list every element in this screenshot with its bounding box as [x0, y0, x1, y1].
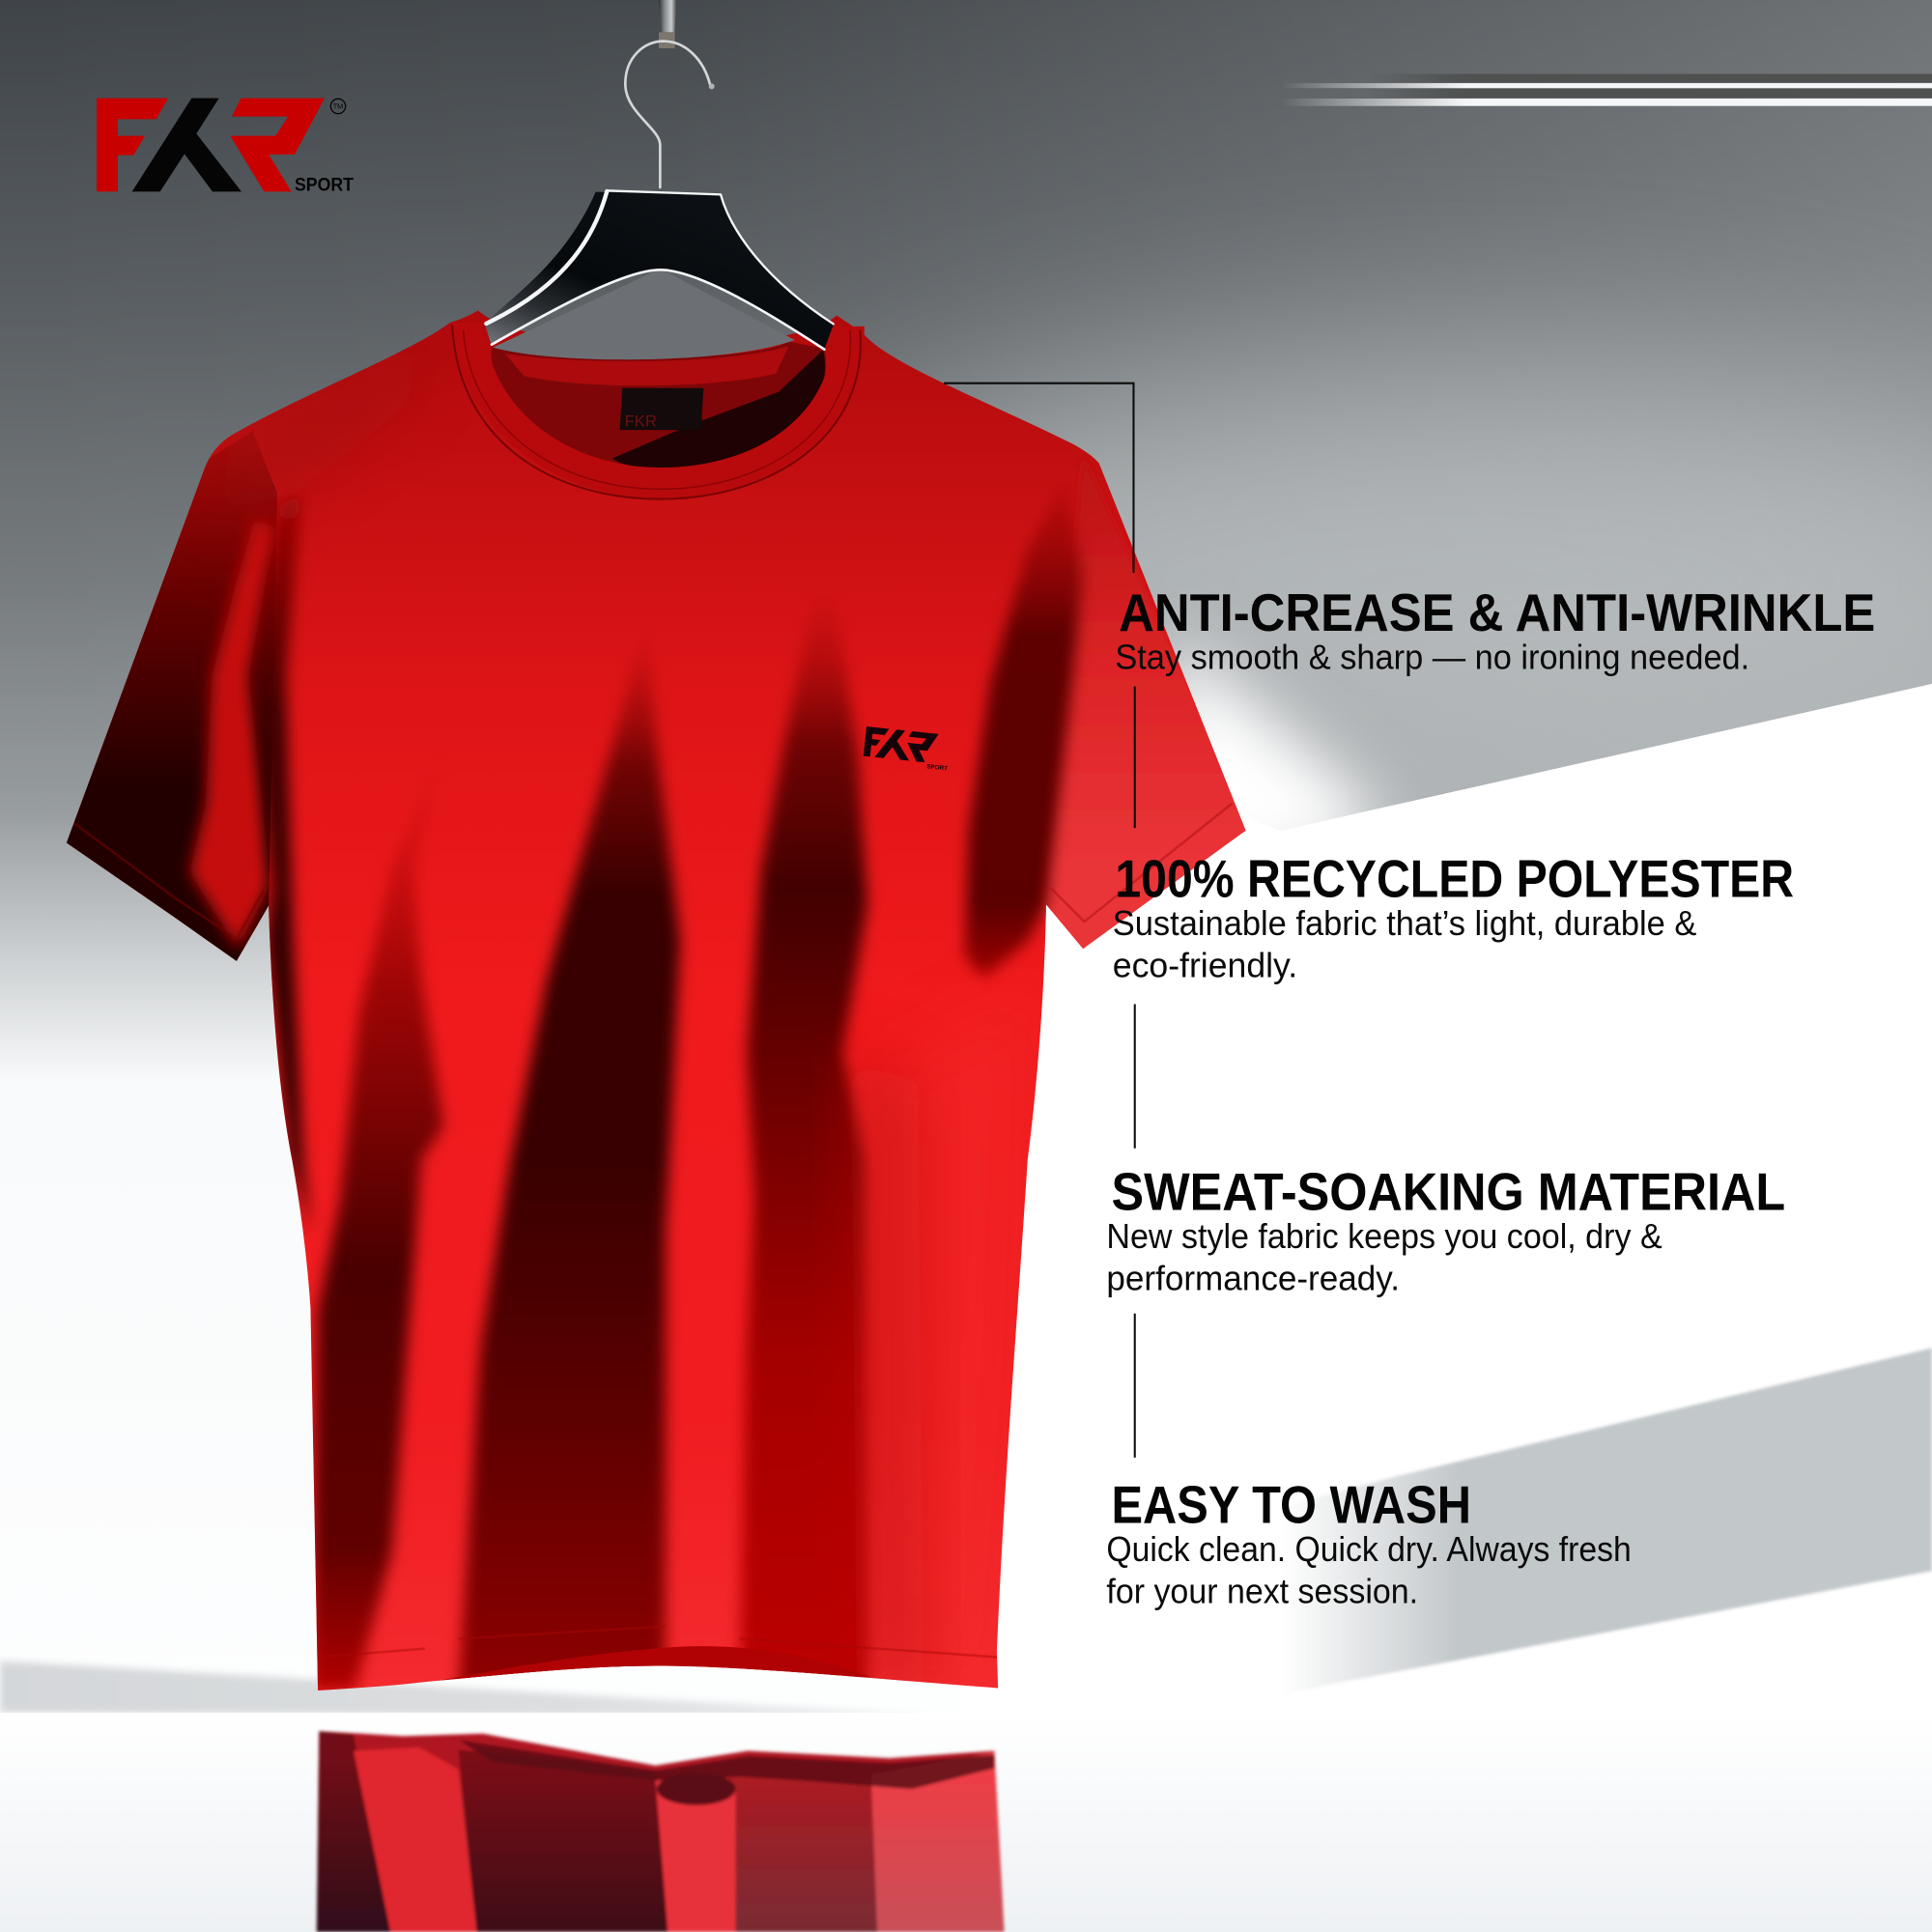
- hanger highlights: [486, 190, 834, 350]
- inner neck shadow: [612, 350, 825, 469]
- chest logo: SPORT: [926, 763, 948, 773]
- feature: recycled polyester: [1113, 849, 1794, 984]
- feature: sweat-soaking: [1106, 1162, 1785, 1297]
- chest logo: [863, 726, 952, 773]
- trademark mark: TM: [333, 102, 343, 111]
- neck label tag: FKR: [625, 412, 657, 430]
- description: for your next session.: [1106, 1571, 1418, 1610]
- shirt body: [67, 310, 1246, 1690]
- feature: anti-crease: [1115, 582, 1875, 677]
- inner neck back: [492, 341, 826, 467]
- metal ceiling rod: [659, 0, 677, 48]
- hook tip: [709, 83, 715, 89]
- gray gap through the neck opening: [493, 269, 795, 359]
- logo letter K: [132, 99, 242, 191]
- t-shirt: [55, 269, 1257, 1690]
- description: Quick clean. Quick dry. Always fresh: [1106, 1529, 1632, 1569]
- ceiling light streak: [1282, 74, 1932, 106]
- logo letter F: [97, 99, 168, 191]
- description: Stay smooth & sharp — no ironing needed.: [1115, 638, 1749, 677]
- description: eco-friendly.: [1113, 945, 1297, 984]
- description: performance-ready.: [1106, 1258, 1400, 1297]
- logo letter R: [230, 99, 325, 191]
- connector lines: [944, 384, 1135, 1458]
- heading: EASY TO WASH: [1112, 1475, 1471, 1535]
- hanger: [485, 0, 834, 350]
- description: Sustainable fabric that’s light, durable &: [1113, 903, 1696, 943]
- heading: SWEAT-SOAKING MATERIAL: [1112, 1162, 1785, 1222]
- heading: ANTI-CREASE & ANTI-WRINKLE: [1119, 582, 1875, 642]
- back collar band: [505, 346, 788, 385]
- collar ribbing: [469, 323, 849, 483]
- feature: easy to wash: [1106, 1475, 1632, 1610]
- neck label tag: [620, 388, 703, 430]
- back hem seen under front: [425, 1646, 870, 1683]
- hanger body: [485, 192, 834, 350]
- fabric shadows: [55, 323, 1257, 1690]
- description: New style fabric keeps you cool, dry &: [1106, 1216, 1662, 1256]
- logo: FKR Sport: [97, 99, 354, 196]
- heading: 100% RECYCLED POLYESTER: [1115, 849, 1794, 909]
- wire hook: [625, 42, 710, 187]
- trademark mark: [330, 99, 346, 114]
- reflection of shirt on floor: [317, 1731, 1005, 1932]
- logo word SPORT: SPORT: [295, 176, 354, 196]
- hem lines: [318, 1627, 998, 1658]
